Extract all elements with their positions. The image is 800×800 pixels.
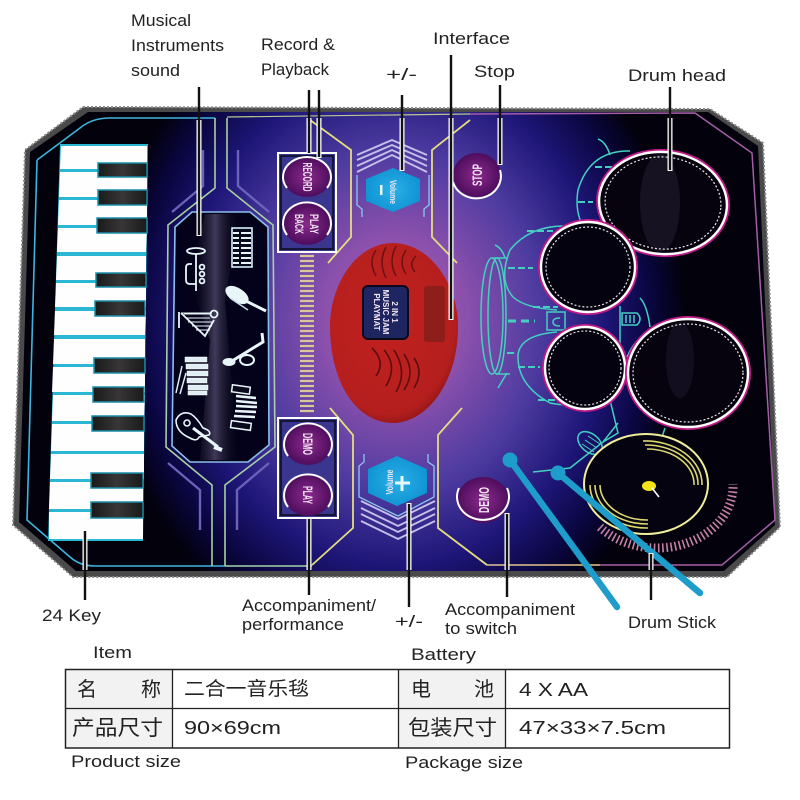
label: volume bottom: +/- <box>395 612 423 631</box>
drum stick: right <box>550 466 700 593</box>
label: interface: Interface <box>433 29 510 48</box>
specification table: 47×33×7.5cm <box>519 718 666 738</box>
button: volume minus: Volume <box>388 180 398 204</box>
specification table: 二合一音乐毯 <box>184 678 309 700</box>
button: stop: STOP <box>469 164 485 186</box>
yellow brackets <box>310 120 487 565</box>
button: playback: PLAY <box>307 214 321 234</box>
product label <box>363 286 408 339</box>
button: demo: DEMO <box>300 433 316 455</box>
label: item: Item <box>93 643 132 662</box>
specification table: 名 <box>77 678 97 701</box>
left neon border <box>27 118 312 566</box>
specification table: 4 X AA <box>519 680 588 700</box>
specification table: 电 <box>411 678 431 701</box>
specification table: 池 <box>474 678 494 701</box>
label: musical instruments sound: Musical <box>131 11 191 30</box>
specification table: 包装尺寸 <box>408 717 497 740</box>
button: volume plus <box>359 454 435 539</box>
label: musical instruments sound <box>131 11 224 80</box>
panel: instrument sounds <box>166 118 275 566</box>
label: record and playback: Record & <box>261 35 336 54</box>
label: record and playback <box>261 35 336 79</box>
label: product size: Product size <box>71 752 181 771</box>
icon: guitar <box>176 413 222 450</box>
button group: record and playback <box>278 153 336 252</box>
specification table: 90×69cm <box>184 718 281 738</box>
button: play: PLAY <box>300 486 316 504</box>
label: battery: Battery <box>411 645 477 664</box>
button: demo switch: DEMO <box>476 487 493 513</box>
label: musical instruments sound: Instruments <box>131 36 224 55</box>
label: volume top: +/- <box>386 65 417 84</box>
product label: 2 IN 1 <box>390 301 399 323</box>
drum pad: lower right <box>625 316 751 430</box>
drum pad: lower left <box>542 324 628 412</box>
button group: demo and play <box>278 418 338 518</box>
right neon border <box>470 113 775 565</box>
product label: MUSIC JAM <box>381 290 390 335</box>
icon: xylophone <box>176 357 208 395</box>
button: playback <box>283 202 331 245</box>
piano keyboard <box>48 144 148 541</box>
ruler stripes <box>300 256 314 411</box>
icon: accordion <box>231 385 257 430</box>
specification table: 称 <box>141 678 161 701</box>
icon: violin <box>222 282 266 311</box>
drum pad: middle left <box>538 219 638 315</box>
label: musical instruments sound: sound <box>131 61 180 80</box>
label: drum head: Drum head <box>628 66 726 85</box>
button: record: RECORD <box>300 162 315 192</box>
control unit <box>330 243 458 423</box>
specification table: 产品尺寸 <box>72 717 163 740</box>
label: stop: Stop <box>474 62 515 81</box>
label: accompaniment and performance <box>242 596 376 634</box>
icon: saxophone <box>223 333 263 366</box>
specification table <box>65 669 730 748</box>
icon: trumpet <box>186 248 205 291</box>
label: accompaniment to switch: to switch <box>445 619 517 638</box>
button: volume minus <box>357 140 429 217</box>
label: accompaniment to switch: Accompaniment <box>445 600 575 619</box>
label: 24 key: 24 Key <box>42 606 102 625</box>
label: drum stick: Drum Stick <box>628 613 717 632</box>
label: accompaniment to switch <box>445 600 575 638</box>
play mat <box>13 107 780 577</box>
display slot <box>424 286 445 342</box>
drum kit outlines <box>481 139 670 472</box>
cymbal <box>584 434 733 548</box>
button: playback: BACK <box>292 214 306 234</box>
drum pad: large top <box>592 143 734 263</box>
label: record and playback: Playback <box>261 60 329 79</box>
label: accompaniment and performance: performance <box>242 615 344 634</box>
label: package size: Package size <box>405 753 523 772</box>
icon: harp <box>179 310 218 336</box>
leader lines <box>85 55 670 607</box>
product label: PLAYMAT <box>372 293 381 331</box>
icon: keyboard <box>232 228 252 267</box>
button: volume plus: Volume <box>385 469 396 494</box>
button: stop <box>453 153 501 198</box>
drum stick: left <box>502 452 617 607</box>
label: accompaniment and performance: Accompaniment/ <box>242 596 376 615</box>
button: demo switch <box>457 477 509 523</box>
